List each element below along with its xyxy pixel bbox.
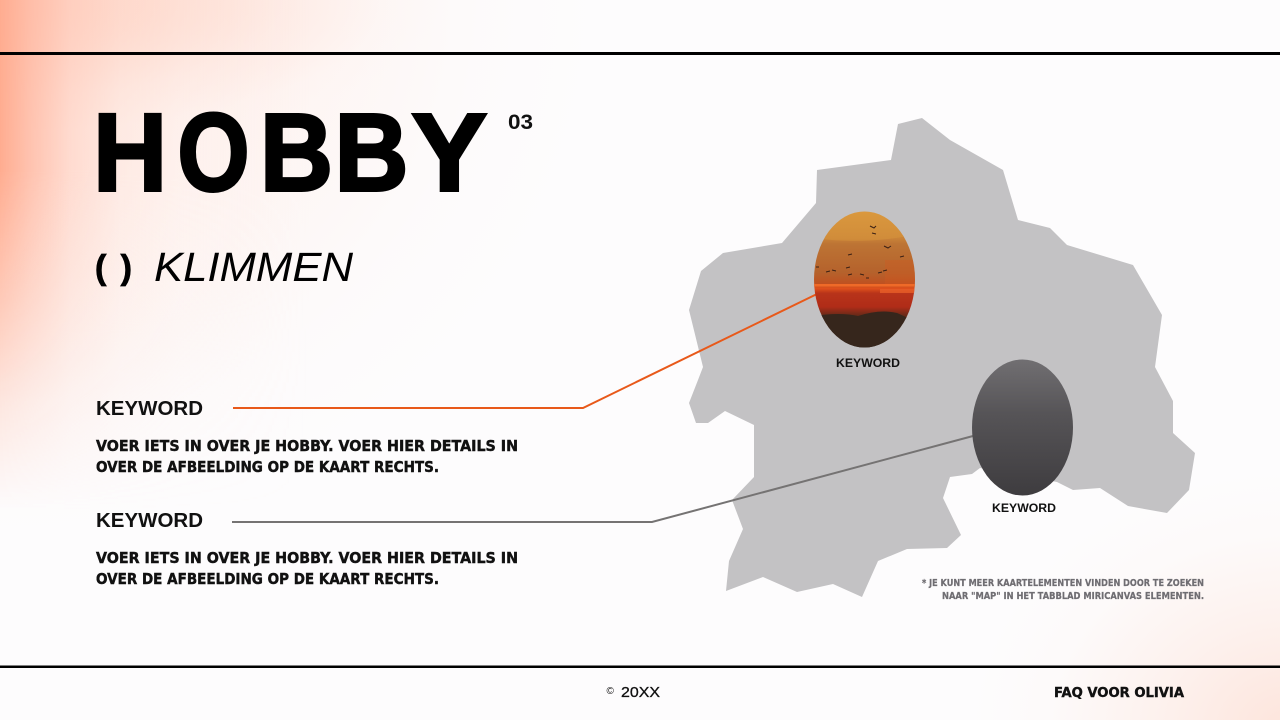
footer author: FAQ VOOR OLIVIA [1054, 686, 1184, 701]
description 1: VOER IETS IN OVER JE HOBBY. VOER HIER DETAILS IN [96, 437, 518, 455]
map label 1: KEYWORD [836, 356, 900, 370]
footer copyright [606, 684, 660, 701]
title [93, 92, 487, 214]
footnote [922, 578, 1204, 602]
description 1 [96, 437, 518, 476]
footer copyright: 20XX [621, 684, 660, 701]
description 2 [96, 549, 518, 588]
description 1: OVER DE AFBEELDING OP DE KAART RECHTS. [96, 458, 439, 476]
section number: 03 [508, 111, 533, 134]
footnote: NAAR "MAP" IN HET TABBLAD MIRICANVAS ELEMENTEN. [942, 591, 1204, 602]
title: O [178, 92, 250, 214]
photo: sunset [814, 211, 915, 348]
footer copyright: © [606, 686, 614, 697]
keyword block 2 [96, 510, 518, 588]
keyword block 1 [96, 398, 518, 476]
description 2: OVER DE AFBEELDING OP DE KAART RECHTS. [96, 570, 439, 588]
connector: grey [232, 436, 973, 522]
title: Y [412, 92, 487, 214]
title: H [93, 92, 167, 214]
keyword heading 1: KEYWORD [96, 398, 203, 420]
connector: orange [233, 294, 817, 408]
description 2: VOER IETS IN OVER JE HOBBY. VOER HIER DETAILS IN [96, 549, 518, 567]
top rule [0, 52, 1280, 55]
subtitle: KLIMMEN [154, 244, 353, 290]
keyword heading 2: KEYWORD [96, 510, 203, 532]
map label 2: KEYWORD [992, 501, 1056, 515]
title: B [260, 92, 333, 214]
footnote: * JE KUNT MEER KAARTELEMENTEN VINDEN DOOR TE ZOEKEN [922, 578, 1204, 589]
bottom rule [0, 666, 1280, 668]
title: B [334, 92, 408, 214]
photo: grey placeholder [972, 360, 1073, 496]
map [689, 118, 1195, 597]
icon: parentheses: ( ) [95, 249, 132, 287]
